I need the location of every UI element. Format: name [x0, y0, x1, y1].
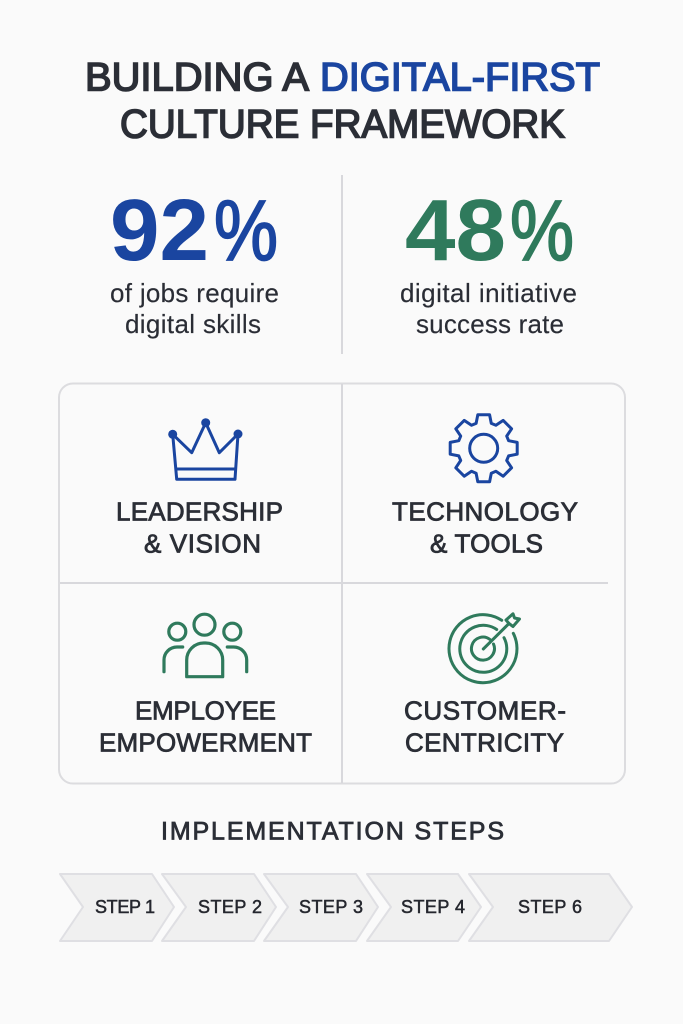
heading: implementation steps: IMPLEMENTATION STEPS [161, 818, 504, 846]
stat: 48 percent digital initiative success rate [400, 182, 577, 339]
icon: target with arrow [449, 614, 520, 683]
step 1 chevron: STEP 1 [95, 897, 155, 917]
title: BUILDING A [85, 56, 310, 100]
step 4 chevron [367, 874, 481, 941]
step 6 chevron: STEP 6 [518, 897, 582, 917]
icon: crown [168, 418, 242, 479]
stat: 92 percent of jobs require digital skills: 92 [110, 182, 209, 279]
label: technology and tools: TECHNOLOGY [392, 496, 578, 526]
stat: 92 percent of jobs require digital skills [110, 182, 279, 339]
title [85, 56, 600, 146]
step 2 chevron: STEP 2 [198, 897, 262, 917]
label: leadership and vision: & VISION [144, 528, 261, 558]
title: DIGITAL-FIRST [320, 56, 600, 100]
title: CULTURE FRAMEWORK [120, 102, 565, 146]
label: employee empowerment: EMPOWERMENT [99, 728, 312, 758]
label: employee empowerment [99, 696, 312, 758]
step 4 chevron: STEP 4 [401, 897, 465, 917]
label: employee empowerment: EMPLOYEE [135, 696, 276, 726]
stat: 92 percent of jobs require digital skills: % [214, 184, 278, 279]
step 6 chevron [469, 874, 632, 941]
stat: 92 percent of jobs require digital skills: of jobs require [110, 278, 279, 308]
label: technology and tools [392, 496, 578, 558]
step 1 chevron [60, 874, 174, 941]
icon: people [164, 614, 247, 677]
stat: 48 percent digital initiative success rate: success rate [416, 309, 564, 339]
stat: 92 percent of jobs require digital skills: digital skills [125, 309, 261, 339]
step 3 chevron [264, 874, 378, 941]
label: customer-centricity [404, 696, 566, 758]
stat: 48 percent digital initiative success rate: 48 [405, 182, 506, 279]
label: customer-centricity: CUSTOMER- [404, 696, 566, 726]
stat: 48 percent digital initiative success rate: % [510, 184, 574, 279]
label: leadership and vision: LEADERSHIP [116, 496, 283, 526]
label: leadership and vision [116, 496, 283, 558]
step 2 chevron [162, 874, 276, 941]
panel: framework pillars [59, 384, 625, 784]
stat: 48 percent digital initiative success rate: digital initiative [400, 278, 577, 308]
icon: gear [450, 415, 517, 482]
step 3 chevron: STEP 3 [299, 897, 363, 917]
label: customer-centricity: CENTRICITY [405, 728, 564, 758]
label: technology and tools: & TOOLS [430, 528, 543, 558]
